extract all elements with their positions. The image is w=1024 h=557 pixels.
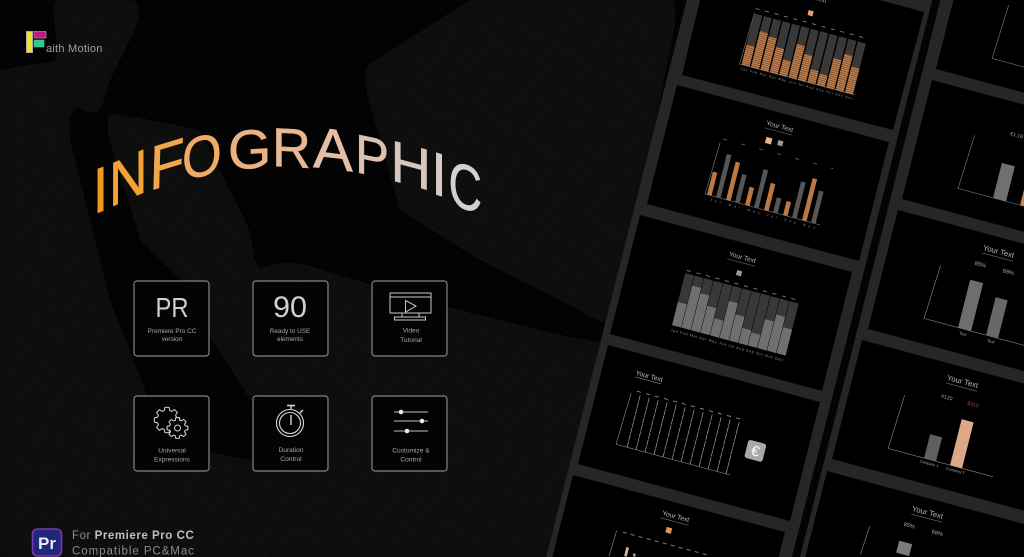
feature box: Customize & Control: Customize & bbox=[392, 448, 430, 454]
chart panel: bottom right percent: 85% bbox=[903, 522, 915, 531]
panel frame: left column bbox=[546, 0, 932, 557]
chart title: Your Text bbox=[661, 510, 690, 524]
chart panel: comparison bars bbox=[832, 340, 1024, 540]
icon: sliders bbox=[394, 410, 428, 433]
chart panel: bottom partial chart bbox=[552, 475, 785, 557]
title: INFOGRAPHIC curved: N bbox=[109, 134, 148, 221]
icon: stopwatch bbox=[276, 406, 304, 436]
chart panel: stacked orange bars bbox=[682, 0, 924, 130]
feature box: Universal Expressions: Expressions bbox=[154, 456, 191, 464]
title: INFOGRAPHIC curved: O bbox=[182, 120, 222, 193]
feature box: Premiere Pro CC version: version bbox=[162, 336, 183, 343]
feature box: Universal Expressions bbox=[134, 396, 209, 471]
feature box: Customize & Control bbox=[372, 396, 447, 471]
chart title: Your Text bbox=[911, 504, 945, 521]
badge: Premiere Pro compatibility bbox=[32, 529, 195, 557]
icon: gears bbox=[154, 407, 188, 438]
title: INFOGRAPHIC curved: P bbox=[355, 123, 389, 191]
icon: video screen bbox=[390, 293, 431, 320]
chart panel: comparison bars: Company 1 bbox=[919, 459, 939, 468]
title: INFOGRAPHIC curved: A bbox=[313, 115, 353, 184]
feature box: Premiere Pro CC version: PR bbox=[156, 292, 188, 323]
feature box: 90 Ready to USE elements: elements bbox=[277, 336, 303, 343]
feature box: 90 Ready to USE elements: 90 bbox=[273, 291, 307, 324]
title: INFOGRAPHIC curved: H bbox=[390, 128, 431, 204]
chart panel: currency bars: €1.18 bbox=[1009, 131, 1024, 140]
icon: Pr: Pr bbox=[38, 534, 56, 553]
logo: Faith Motion bbox=[26, 32, 103, 55]
chart panel: percent grey bars: Text bbox=[959, 330, 968, 337]
panel frame: right column bbox=[800, 0, 1024, 557]
feature box: Customize & Control: Control bbox=[400, 456, 422, 464]
icon: Pr bbox=[32, 529, 62, 556]
chart panel: comparison bars: $310 bbox=[966, 401, 979, 409]
badge: Premiere Pro compatibility: For Premiere Pro CC bbox=[72, 530, 194, 542]
chart title: Your Text bbox=[728, 251, 757, 265]
feature box: Duration Control: Duration bbox=[279, 447, 304, 454]
chart title: Your Text bbox=[946, 373, 980, 390]
chart panel: paired bars: Jan Mar May Jul Sep Nov bbox=[710, 198, 816, 230]
icon: euro badge bbox=[744, 439, 767, 462]
chart title: Your Text bbox=[765, 120, 794, 134]
chart panel: comparison bars: Company 2 bbox=[945, 466, 965, 475]
feature box: Video Tutorial: Tutorial bbox=[400, 337, 422, 344]
feature box: Premiere Pro CC version: Premiere Pro CC bbox=[148, 328, 197, 335]
feature box: Duration Control bbox=[253, 396, 328, 471]
title: INFOGRAPHIC curved: I bbox=[431, 138, 447, 211]
chart panel: bottom right percent bbox=[805, 471, 1024, 557]
chart panel: percent grey bars: 85% bbox=[974, 261, 986, 270]
chart panel: thin lines with euro badge bbox=[578, 345, 820, 521]
chart panel: percent grey bars bbox=[868, 210, 1024, 410]
chart panel: percent grey bars: Text bbox=[987, 338, 996, 345]
title: INFOGRAPHIC curved: F bbox=[149, 124, 185, 204]
chart panel: stacked grey bars bbox=[610, 215, 852, 391]
chart panel: bottom right percent: 68% bbox=[931, 529, 943, 538]
feature box: Video Tutorial: Video bbox=[403, 328, 420, 334]
feature box: 90 Ready to USE elements: Ready to USE bbox=[270, 328, 310, 335]
feature box: Universal Expressions: Universal bbox=[158, 448, 186, 454]
chart title: Your Text bbox=[635, 370, 663, 384]
feature box: Video Tutorial bbox=[372, 281, 447, 356]
icon: euro badge: € bbox=[749, 443, 761, 461]
feature box: Premiere Pro CC version bbox=[134, 281, 209, 356]
title: INFOGRAPHIC curved: I bbox=[92, 152, 109, 229]
chart panel: percent grey bars: 68% bbox=[1002, 268, 1014, 277]
title: INFOGRAPHIC curved: R bbox=[272, 117, 311, 180]
chart panel: comparison bars: #120 bbox=[940, 394, 953, 402]
chart panel: paired bars bbox=[647, 85, 889, 261]
chart title: Your Text bbox=[982, 243, 1016, 260]
chart panel: currency bars bbox=[902, 80, 1024, 280]
title: INFOGRAPHIC curved: G bbox=[228, 118, 271, 181]
title: INFOGRAPHIC curved bbox=[92, 115, 482, 229]
feature box: 90 Ready to USE elements bbox=[253, 281, 328, 356]
chart panel: right column top bbox=[936, 0, 1024, 150]
title: INFOGRAPHIC curved: C bbox=[448, 148, 482, 229]
chart panel: stacked grey bars: Jan Feb Mar Apr May Jun Jul Aug Sep Oct Nov Dec bbox=[670, 328, 783, 362]
feature box: Duration Control: Control bbox=[280, 456, 302, 463]
logo: Faith Motion: aith Motion bbox=[46, 43, 103, 55]
chart panel: stacked orange bars: Jan Feb Mar Apr May Jun Jul Aug Sep Oct Nov Dec bbox=[740, 67, 853, 101]
